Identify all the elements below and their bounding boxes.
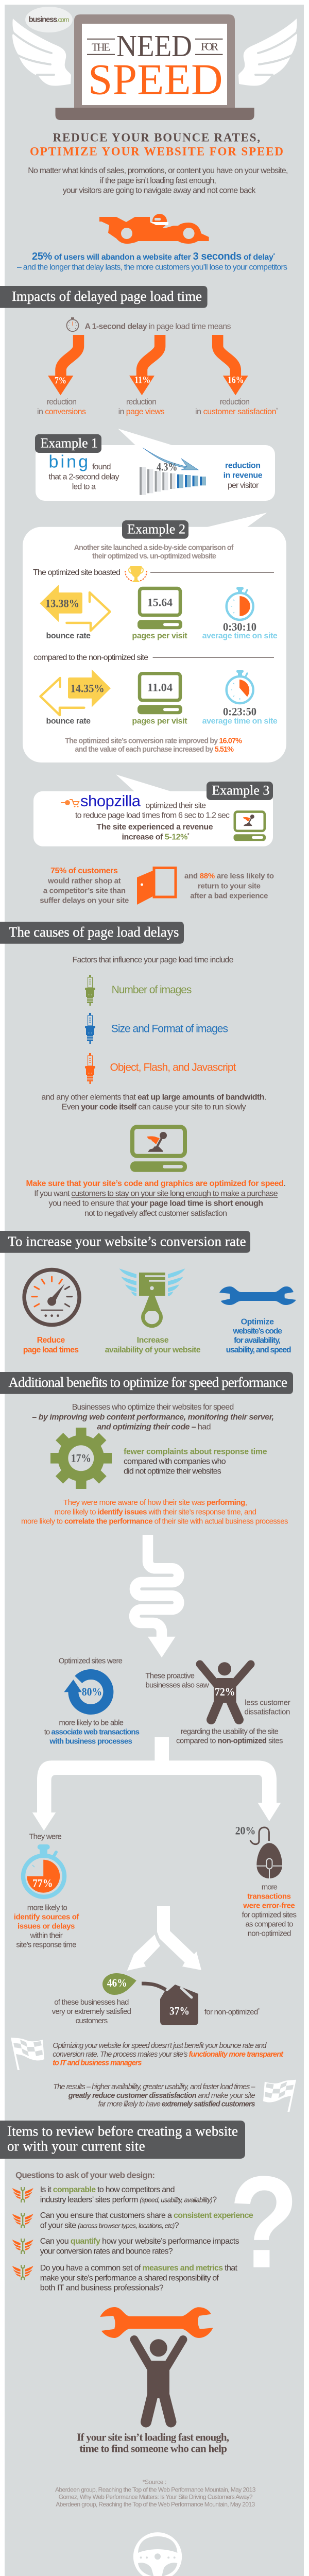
benefit: 37 percent: *: [258, 2007, 260, 2012]
icon: left checkered flag: [11, 2038, 44, 2070]
question 4: Do you have a common set of measures and metrics that: [40, 2264, 238, 2273]
statistic: 75 percent of customers: would rather shop at: [47, 876, 121, 885]
section heading: impacts: [0, 286, 208, 308]
metric: bounce rate 13.38: 13.38%: [45, 597, 79, 609]
logo: bing: bing: [48, 452, 88, 472]
reduction in revenue text: [224, 461, 263, 490]
title: SPEED: [88, 56, 222, 104]
title: [87, 29, 222, 104]
benefit: 46 percent: [52, 1973, 136, 2025]
sources: Gomez, Why Web Performance Matters: Is Your Site Driving Customers Away?: [59, 2494, 253, 2501]
impact: conversions: reduction: [47, 398, 77, 406]
advice text: you need to ensure that your page load time is short enough: [48, 1199, 263, 1208]
benefit: 77 percent: site’s response time: [16, 1940, 76, 1949]
benefit: 72 percent: dissatisfaction: [244, 1707, 290, 1716]
icon: blue spark plug: [85, 1013, 95, 1044]
icon: left wing: [10, 19, 71, 86]
statistic: 25 percent abandon: [17, 251, 287, 272]
icon: winged wrench: [12, 2187, 33, 2202]
non-optimized heading: compared to the non-optimized site: [33, 653, 148, 662]
cause: size and format: [85, 1013, 228, 1044]
action: optimize code: usability, and speed: [226, 1346, 291, 1354]
question 2: [12, 2211, 253, 2230]
impact: customer satisfaction: 16%: [228, 375, 244, 385]
benefit: 72 percent: 72%: [215, 1685, 235, 1698]
benefit: 72 percent: regarding the usability of the site: [181, 1727, 279, 1736]
section heading: causes: [0, 922, 184, 944]
example 1 text: that a 2-second delay: [48, 472, 119, 481]
example 2 conclusion: [65, 737, 242, 754]
illustration: person lifting wrench: [100, 2307, 213, 2422]
question 4: make your site’s performance a shared responsibility of: [40, 2274, 219, 2282]
intro paragraph: your visitors are going to navigate away and not come back: [63, 187, 256, 195]
benefit: 20 percent: 20%: [235, 1824, 255, 1837]
icon: big question mark: ?: [229, 2149, 299, 2295]
benefit: 46 percent: of these businesses had: [54, 1998, 129, 2007]
cause: number of images: [85, 975, 192, 1006]
causes intro: Factors that influence your page load time include: [72, 956, 234, 964]
example 2 intro: their optimized vs. un-optimized website: [92, 552, 216, 561]
benefit: 80 percent: 80%: [82, 1685, 102, 1698]
question 2: of your site (across browser types, locations, etc)?: [40, 2221, 179, 2230]
statistic: 75 percent of customers: 75% of customers: [50, 867, 118, 875]
statistic: 88 percent: after a bad experience: [190, 891, 268, 900]
icon: right wing: [238, 19, 299, 86]
impact: page views: [118, 335, 165, 416]
icon: computer mouse: [250, 1827, 282, 1878]
cause: object flash javascript: Object, Flash, and Javascript: [110, 1061, 236, 1073]
causes closing text: and any other elements that eat up large amounts of bandwidth.: [41, 1093, 266, 1101]
question 1: Is it comparable to how competitors and: [40, 2185, 175, 2194]
arrow: white forked arrow: [127, 1906, 201, 1971]
section heading: conversion rate: [0, 1231, 250, 1253]
title: FOR: [201, 40, 218, 53]
benefits intro: and optimizing their code – had: [97, 1423, 211, 1432]
closing message: [77, 2431, 229, 2454]
panel: example 2: [23, 513, 286, 762]
impact: page views: reduction: [126, 398, 157, 406]
arrow: trending down: [143, 448, 198, 470]
action: optimize code: Optimize: [241, 1318, 274, 1327]
subtitle: REDUCE YOUR BOUNCE RATES,: [53, 131, 260, 144]
closing message: time to find someone who can help: [79, 2442, 227, 2454]
metric: bounce rate 14.35: 14.35%: [71, 682, 105, 694]
icon: small monitor with gear shift: [234, 812, 266, 841]
reduction in revenue text: per visitor: [228, 481, 259, 490]
icon: cheering person: [200, 1662, 251, 1720]
statistic: 88 percent: [184, 872, 274, 900]
note: functionality: [53, 2042, 284, 2067]
advice text: If you want customers to stay on your site long enough to make a purchase: [34, 1189, 278, 1198]
one-second delay intro: [67, 317, 231, 331]
action: increase availability: availability of your website: [105, 1346, 201, 1354]
icon: stopwatch: [67, 317, 78, 331]
statistic: 75 percent of customers: [40, 867, 129, 905]
note: functionality: to IT and business managers: [53, 2059, 142, 2067]
metric: time on site 0:30:10: [202, 587, 278, 640]
question 4: both IT and business professionals?: [40, 2284, 164, 2293]
arrow: [48, 335, 78, 395]
statistic: 75 percent of customers: suffer delays on your site: [40, 896, 129, 905]
example 3 label: [207, 782, 273, 800]
impact: customer satisfaction: in customer satisfaction: [195, 408, 277, 416]
laptop base: [56, 108, 254, 120]
icon: winged piston: [119, 1268, 185, 1326]
sources: [55, 2479, 256, 2508]
impact: customer satisfaction: [195, 335, 278, 416]
example 1 text: led to a: [72, 483, 96, 492]
business.com badge: [25, 7, 73, 32]
benefit: 72 percent: These proactive: [145, 1671, 195, 1680]
question 2: Can you ensure that customers share a consistent experience: [40, 2211, 253, 2220]
benefit: 77 percent: issues or delays: [18, 1922, 75, 1930]
section heading: conversion rate: To increase your website’s conversion rate: [8, 1233, 246, 1249]
benefit: 72 percent: compared to non-optimized sites: [176, 1736, 283, 1745]
note: results: greatly reduce customer dissatisfaction and make your site: [68, 2092, 255, 2100]
orange statement: They were more aware of how their site was performing,: [63, 1498, 247, 1507]
icon: green spark plug: [85, 975, 95, 1006]
benefit: 37 percent: [142, 1984, 260, 2025]
benefit: 80 percent: more likely to be able: [59, 1718, 124, 1727]
causes closing text: Even your code itself can cause your site to run slowly: [62, 1103, 246, 1111]
panel: example 1: [35, 429, 275, 501]
action: optimize code: [226, 1318, 291, 1354]
section heading: items to review: [0, 2121, 245, 2159]
metric: bounce rate 13.38: [40, 585, 110, 640]
icon: winged wrench: [12, 2265, 33, 2280]
metric: time on site 0:30:10: average time on site: [202, 632, 278, 640]
question 1: [12, 2185, 217, 2204]
speech bubble: [23, 513, 286, 762]
note: results: [53, 2083, 256, 2109]
title: NEED: [116, 29, 192, 63]
benefit: 20 percent: transactions: [247, 1892, 291, 1901]
icon: green drop: [102, 1973, 136, 1995]
benefit: 37 percent: for non-optimized: [204, 2008, 258, 2016]
icon: gear 17 percent: 17%: [71, 1451, 91, 1464]
icon: open door: [137, 868, 176, 905]
benefits intro: – by improving web content performance, monitoring their server,: [32, 1413, 274, 1421]
benefit: 80 percent: with business processes: [49, 1737, 132, 1745]
section heading: causes: The causes of page load delays: [9, 924, 179, 940]
example 2 intro: Another site launched a side-by-side comparison of: [74, 544, 234, 552]
benefit: 80 percent: to associate web transactions: [44, 1727, 140, 1736]
benefit: 20 percent: as compared to: [245, 1920, 294, 1928]
impact: conversions: in conversions: [37, 408, 86, 416]
note: results: The results – higher availability, greater usability, and faster load times –: [53, 2083, 256, 2091]
icon: right checkered flag: [263, 2080, 296, 2112]
action: reduce load times: Reduce: [37, 1336, 65, 1345]
example 3 text: optimized their site: [145, 801, 206, 810]
question 3: [12, 2237, 239, 2256]
arrow: white branching connector: [32, 1737, 281, 1831]
causes closing text: [41, 1093, 266, 1111]
benefit: 77 percent: within their: [30, 1931, 63, 1940]
metric: pages per visit 15.64: [132, 588, 187, 640]
statistic: 25 percent abandon: *: [273, 252, 275, 258]
impact: page views: 11%: [134, 375, 150, 385]
action: increase availability: [105, 1336, 201, 1354]
example 3 text: [75, 801, 230, 841]
reduction in revenue text: in revenue: [224, 471, 263, 480]
icon: orange spark plug: [85, 1053, 95, 1084]
example 2 conclusion: and the value of each purchase increased by 5.51%: [75, 745, 234, 754]
icon: circular arrow: [64, 1674, 108, 1709]
benefit: 77 percent: They were: [29, 1832, 62, 1841]
subtitle: [30, 131, 283, 158]
one-second delay intro: A 1-second delay in page load time means: [84, 322, 231, 331]
statistic: 88 percent: and 88% are less likely to: [184, 872, 274, 880]
icon: winged wrench: [12, 2239, 33, 2254]
icon: orange wrench: [100, 2307, 213, 2338]
example 1 label: [35, 434, 101, 453]
example 3 label: Example 3: [212, 783, 269, 798]
cause: size and format: Size and Format of images: [111, 1023, 228, 1035]
closing message: If your site isn’t loading fast enough,: [77, 2431, 229, 2444]
benefit: 46 percent: very or extremely satisfied: [52, 2007, 131, 2016]
metric: pages per visit 15.64: pages per visit: [132, 632, 187, 640]
sources: Aberdeen group, Reaching the Top of the Web Performance Mountain, May 2013: [55, 2486, 256, 2493]
4.3 percent: 4.3%: [157, 460, 177, 473]
action: optimize code: website’s code: [232, 1327, 282, 1335]
impact: page views: in page views: [118, 408, 165, 416]
business.com badge: business.com: [29, 15, 69, 24]
example 3 text: to reduce page load times from 6 sec to 1.2 sec: [75, 811, 230, 820]
section heading: items to review: or with your current site: [7, 2139, 145, 2154]
action: optimize code: for availability,: [234, 1336, 281, 1345]
question 3: Can you quantify how your website’s performance impacts: [40, 2237, 239, 2246]
metric: bounce rate 14.35: [40, 669, 111, 725]
benefit: 46 percent: customers: [76, 2016, 108, 2025]
laptop frame: [74, 14, 235, 108]
icon: person: [134, 2339, 183, 2422]
icon: steering wheel: [133, 2532, 182, 2576]
benefits intro: Businesses who optimize their websites for speed: [72, 1403, 234, 1412]
metric: time on site 0:23:50: [202, 670, 278, 725]
speech bubble: [33, 774, 273, 846]
example 3 text: increase of 5-12%: [122, 833, 187, 841]
benefit: 20 percent: non-optimized: [248, 1929, 291, 1938]
sources: *Source :: [143, 2479, 166, 2486]
note: results: far more likely to have extremely satisfied customers: [98, 2100, 255, 2109]
advice text: Make sure that your site’s code and graphics are optimized for speed.: [26, 1179, 286, 1188]
example 1 text: found: [92, 463, 111, 471]
example 1 text: [48, 463, 119, 492]
statistic: 25 percent abandon: – and the longer that delay lasts, the more customers you’ll lose to your competitors: [17, 263, 287, 272]
reduction in revenue text: reduction: [225, 461, 261, 470]
example 2 label: Example 2: [127, 522, 185, 537]
question 3: your conversion rates and bounce rates?: [40, 2247, 173, 2256]
metric: pages per visit 15.64: 15.64: [147, 596, 173, 609]
metric: pages per visit 11.04: [132, 673, 187, 725]
icon: trophy: [125, 566, 147, 582]
benefit: 20 percent: were error-free: [243, 1901, 295, 1910]
speech bubble: [36, 429, 275, 501]
gear text: fewer complaints about response time: [124, 1447, 267, 1456]
section heading: additional benefits: [0, 1372, 293, 1394]
metric: bounce rate 13.38: bounce rate: [46, 632, 91, 640]
metric: time on site 0:30:10: 0:30:10: [223, 620, 256, 633]
benefit: 20 percent: more: [262, 1883, 278, 1891]
questions heading: Questions to ask of your web design:: [15, 2170, 155, 2180]
benefit: 20 percent: [235, 1824, 297, 1938]
benefit: 77 percent: more likely to: [27, 1903, 67, 1912]
example 3 text: *: [187, 832, 190, 837]
icon: monitor with gear shift: [130, 1127, 187, 1172]
laptop screen: [82, 24, 227, 105]
benefit: 46 percent: 46%: [107, 1976, 127, 1989]
metric: time on site 0:23:50: average time on site: [202, 717, 278, 725]
intro paragraph: No matter what kinds of sales, promotions, or content you have on your website,: [28, 166, 288, 175]
example 2 intro: [74, 544, 234, 561]
benefit: 37 percent: 37%: [169, 2005, 190, 2018]
icon: speedometer: [24, 1269, 79, 1325]
benefits intro: [32, 1403, 274, 1432]
icon: fuel pump: [142, 1984, 198, 2025]
panel: example 3: [33, 774, 273, 846]
impact: customer satisfaction: reduction: [220, 398, 250, 406]
note: functionality: conversion rate. The process makes your site’s functionality more transparent: [53, 2050, 284, 2059]
arrow: white winding road: [134, 1535, 179, 1657]
question 1: industry leaders’ sites perform (speed, usability, availability)?: [40, 2195, 217, 2204]
benefit: 77 percent: 77%: [32, 1877, 53, 1890]
section heading: impacts: Impacts of delayed page load time: [12, 289, 202, 304]
icon: large stopwatch: [23, 1844, 64, 1897]
benefit: 20 percent: for optimized sites: [242, 1910, 297, 1919]
icon: racing car: [99, 214, 209, 244]
gear text: compared with companies who: [124, 1458, 226, 1466]
question 4: [12, 2264, 238, 2293]
benefit: 72 percent: less customer: [245, 1698, 290, 1707]
example 1 label: Example 1: [40, 436, 98, 451]
sources: Aberdeen group, Reaching the Top of the Web Performance Mountain, May 2013: [56, 2501, 255, 2508]
statistic: 75 percent of customers: a competitor’s site than: [43, 886, 126, 895]
metric: pages per visit 11.04: 11.04: [147, 681, 173, 694]
icon: blue wrench: [219, 1286, 296, 1305]
intro paragraph: [28, 166, 288, 195]
optimized heading: The optimized site boasted: [33, 568, 121, 577]
orange statement: more likely to identify issues with their site’s response time, and: [55, 1507, 256, 1516]
benefit: 80 percent: Optimized sites were: [59, 1656, 123, 1665]
orange statement: more likely to correlate the performance of their site with actual business processes: [21, 1517, 288, 1526]
benefit: 77 percent: [14, 1832, 79, 1949]
statistic: 88 percent: return to your site: [198, 882, 261, 890]
section heading: items to review: Items to review before creating a website: [7, 2124, 238, 2139]
section heading: additional benefits: Additional benefits to optimize for speed performance: [8, 1375, 287, 1390]
metric: time on site 0:23:50: 0:23:50: [223, 705, 256, 718]
impact: conversions: 7%: [55, 375, 66, 386]
icon: winged wrench: [12, 2213, 33, 2228]
advice text: not to negatively affect customer satisfaction: [84, 1209, 227, 1218]
metric: pages per visit 11.04: pages per visit: [132, 717, 187, 725]
action: reduce load times: page load times: [23, 1346, 79, 1354]
impact: customer satisfaction: *: [276, 407, 278, 412]
bar chart: declining revenue: [140, 467, 206, 495]
orange statement: [21, 1498, 288, 1526]
title: THE: [92, 41, 110, 54]
cause: object flash javascript: [85, 1053, 236, 1084]
cause: number of images: Number of images: [112, 984, 192, 996]
logo: shopzilla: shopzilla: [80, 792, 141, 810]
action: reduce load times: [23, 1336, 79, 1354]
gear text: [124, 1447, 267, 1476]
note: functionality: Optimizing your website for speed doesn’t just benefit your bounce rate and: [53, 2042, 267, 2050]
action: increase availability: Increase: [137, 1336, 169, 1345]
example 2 conclusion: The optimized site’s conversion rate improved by 16.07%: [65, 737, 242, 745]
impact: conversions: [37, 335, 86, 416]
icon: gear 17 percent: [50, 1428, 112, 1489]
benefit: 77 percent: identify sources of: [14, 1912, 79, 1921]
arrow: [218, 335, 248, 395]
advice text: [26, 1179, 286, 1218]
arrow: [129, 335, 160, 395]
metric: bounce rate 14.35: bounce rate: [46, 717, 91, 725]
gear text: did not optimize their websites: [124, 1467, 221, 1476]
subtitle: OPTIMIZE YOUR WEBSITE FOR SPEED: [30, 145, 283, 158]
statistic: 25 percent abandon: 25% of users will abandon a website after 3 seconds of delay: [32, 251, 273, 262]
header illustration: winged laptop: [10, 7, 299, 120]
benefit: 72 percent: [145, 1662, 290, 1745]
benefit: 72 percent: businesses also saw: [145, 1681, 209, 1689]
example 3 text: The site experienced a revenue: [97, 823, 213, 832]
benefit: 80 percent: [44, 1656, 140, 1745]
intro paragraph: if the page isn’t loading fast enough,: [100, 176, 216, 185]
